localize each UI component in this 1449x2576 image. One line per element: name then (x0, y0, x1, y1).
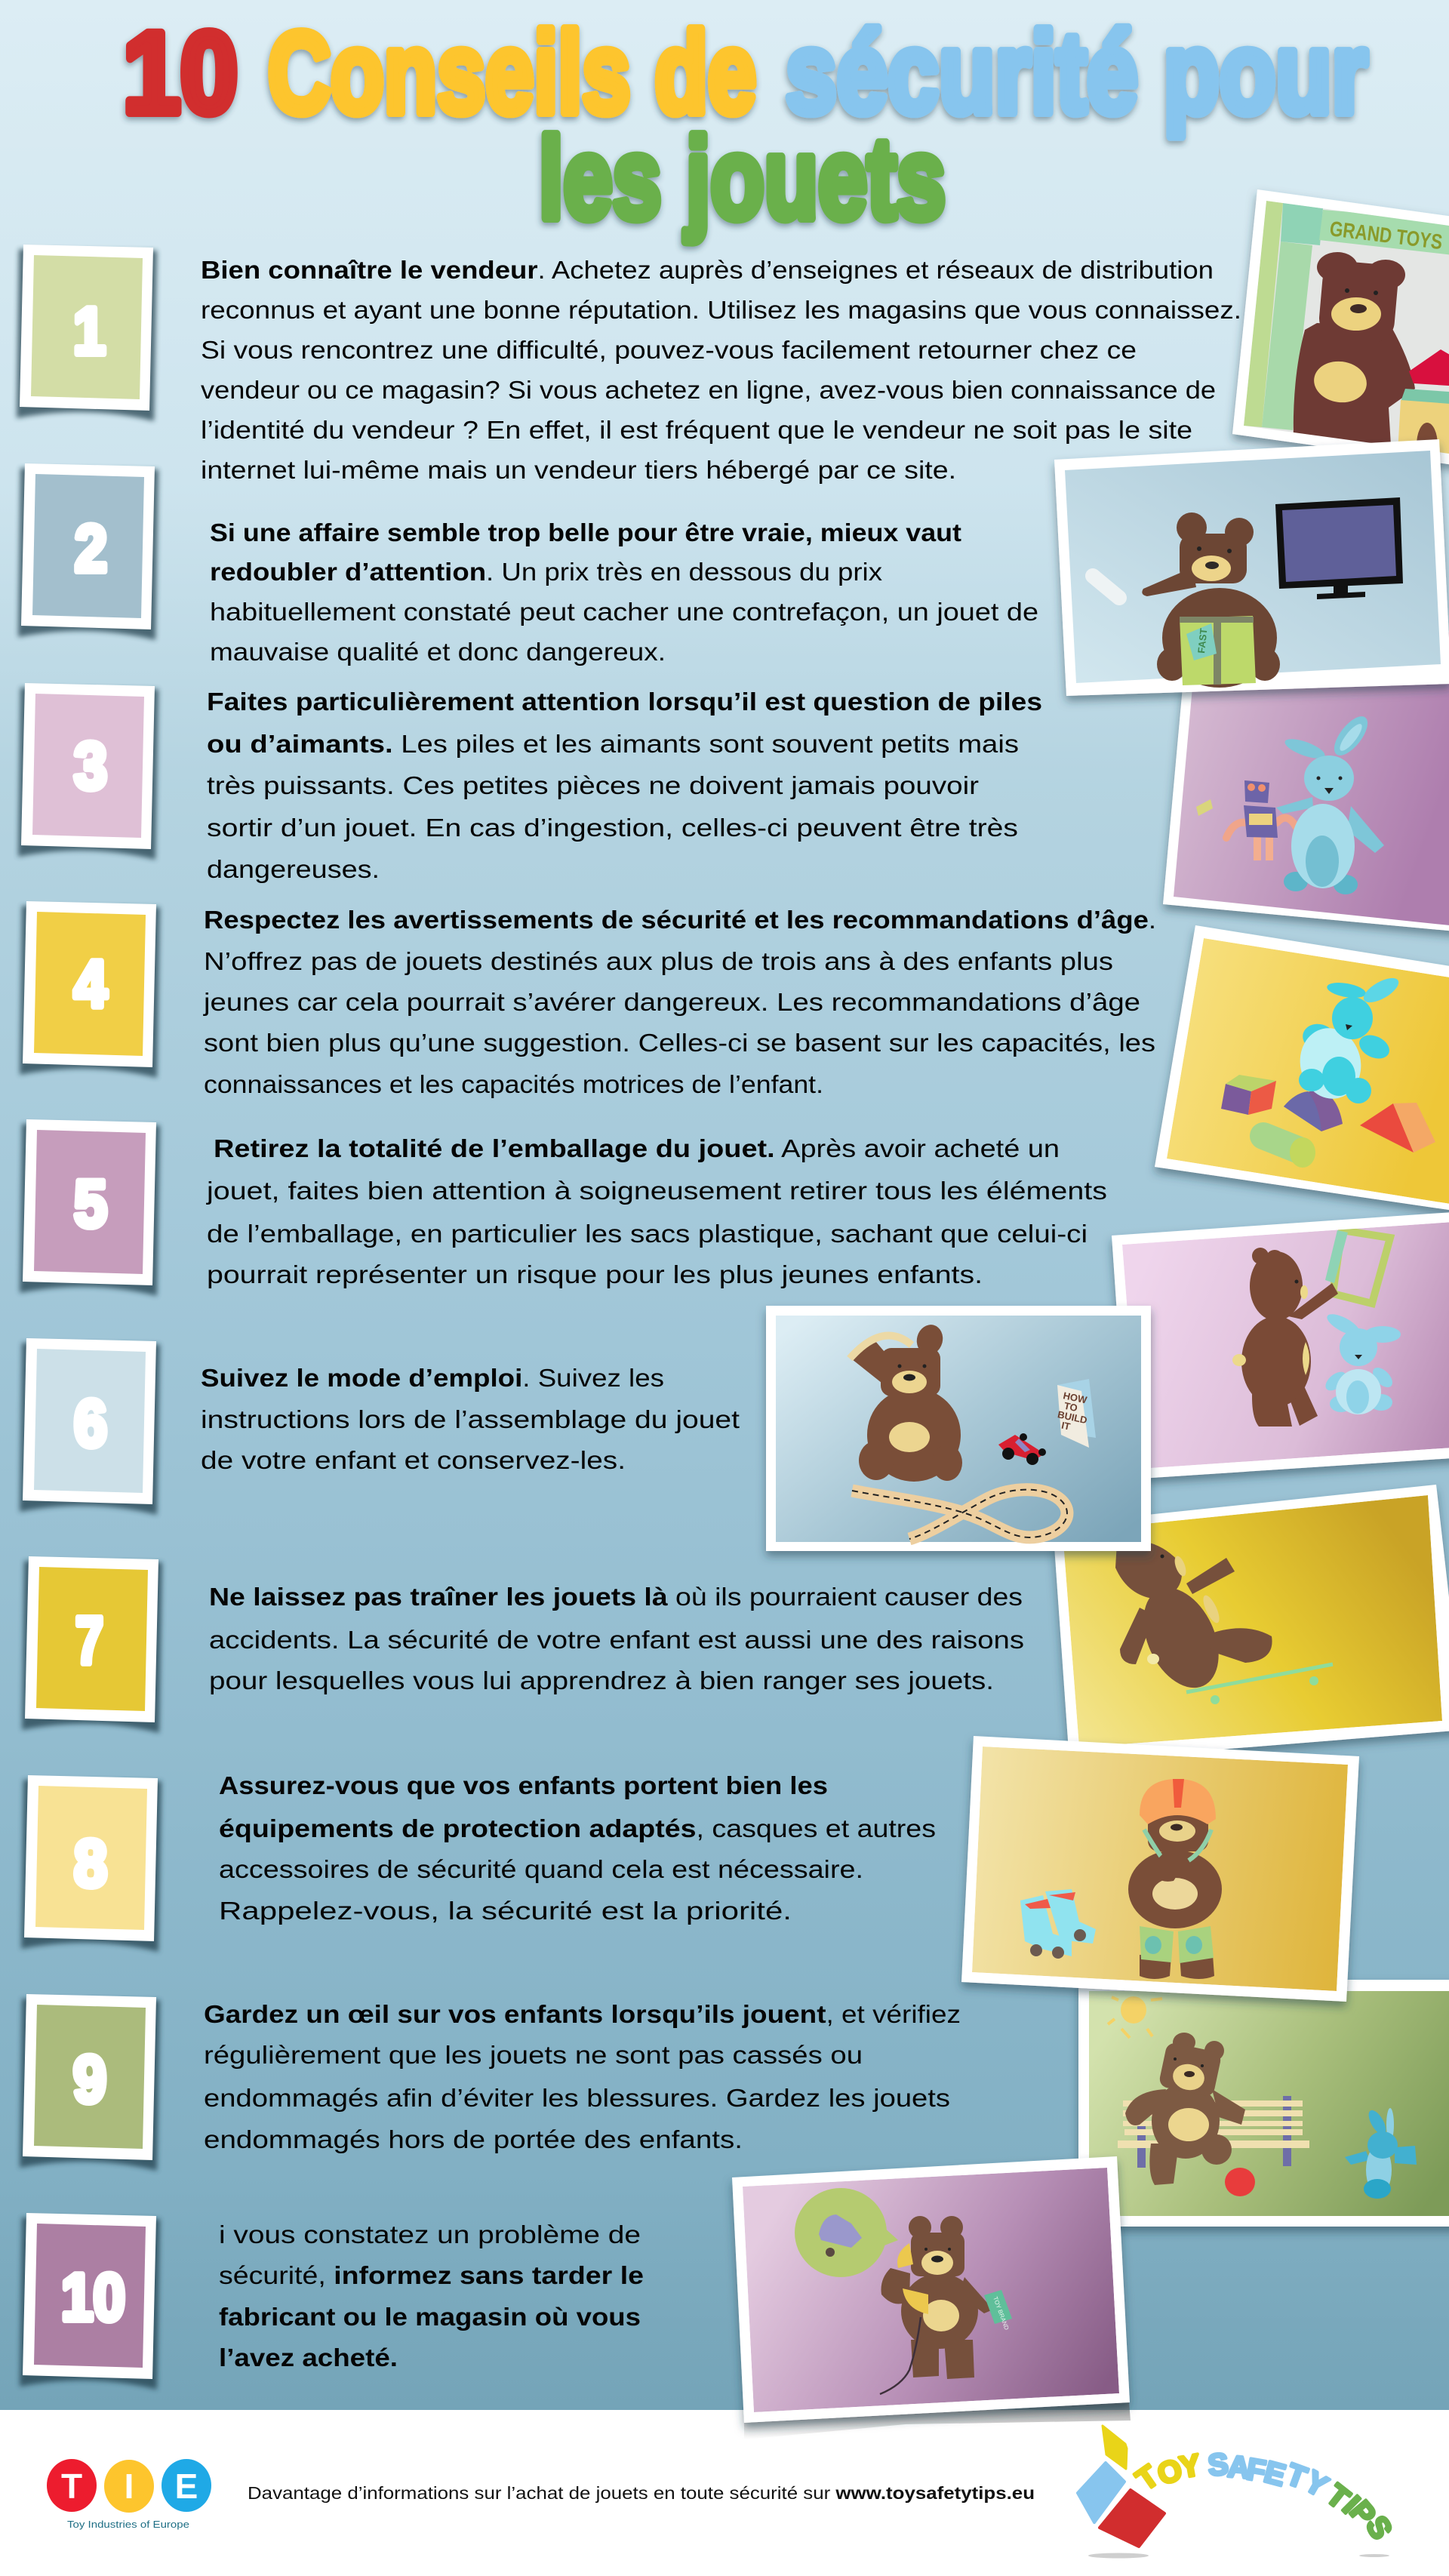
track (852, 1490, 1067, 1539)
tip 6 text: de votre enfant et conservez-les. (201, 1446, 626, 1474)
number tile 4: 4 (74, 946, 107, 1021)
instruction booklet: IT (1060, 1420, 1072, 1433)
tip 2 text: Si une affaire semble trop belle pour être vraie, mieux vaut (210, 519, 961, 546)
tip 7 text: Ne laissez pas traîner les jouets là où ils pourraient causer des (209, 1583, 1023, 1611)
number tile 3 (18, 683, 158, 860)
tip 1 text: Bien connaître le vendeur . Achetez auprès d’enseignes et réseaux de distribution (201, 256, 1214, 284)
photo 2: bear, TV and parcel (1054, 439, 1449, 696)
bear (880, 2216, 993, 2394)
footer: Toy Safety Tips logo (1078, 2426, 1398, 2559)
footer: TIE logo (47, 2459, 211, 2530)
footer: TIE logo: T (61, 2467, 82, 2506)
ID tag: TOY BRAND (992, 2296, 1011, 2331)
tip 3 text: sortir d’un jouet. En cas d’ingestion, celles-ci peuvent être très (207, 814, 1018, 842)
tip 8 text: Assurez-vous que vos enfants portent bien les (219, 1771, 828, 1799)
photo 10: bear calling on the phone (732, 2156, 1130, 2423)
photo 3: rabbit and robot (1163, 604, 1449, 936)
title (123, 8, 1367, 243)
tip 4 text: N’offrez pas de jouets destinés aux plus de trois ans à des enfants plus (204, 947, 1113, 975)
bench (1118, 2096, 1309, 2168)
footer: Toy Safety Tips logo: TIPS (1320, 2478, 1398, 2545)
number tile 3: 3 (74, 728, 107, 803)
ID tag (984, 2290, 1012, 2331)
number tile 8 (21, 1775, 162, 1952)
tip 5 text: Retirez la totalité de l’emballage du jouet. Après avoir acheté un (214, 1134, 1060, 1162)
tip 8 text (219, 1771, 936, 1925)
photo 1: bear at toy store (1232, 189, 1449, 468)
title: les jouets (539, 114, 946, 243)
number tile 7: 7 (75, 1603, 103, 1678)
tip 5 text (206, 1134, 1107, 1288)
sticker (1196, 799, 1213, 816)
ball (1225, 2168, 1255, 2196)
tip 8 text: équipements de protection adaptés , casques et autres (219, 1814, 936, 1842)
photo 10 footer shadow (744, 2402, 1131, 2439)
tip 1 text (201, 256, 1241, 484)
footer band (0, 2410, 1449, 2576)
number tile 2 (18, 463, 158, 640)
photo 9: bear on bench with rabbit (1078, 1980, 1449, 2227)
tip 7 text (209, 1583, 1024, 1694)
television (1275, 497, 1403, 599)
tip 5 text: de l’emballage, en particulier les sacs plastique, sachant que celui-ci (207, 1220, 1088, 1248)
rabbit (1322, 1310, 1401, 1414)
photo 4: rabbit and blocks (1155, 925, 1449, 1212)
eraser (1093, 576, 1119, 598)
tip 3 text: ou d’aimants. Les piles et les aimants sont souvent petits mais (207, 730, 1019, 758)
tip 3 text: Faites particulièrement attention lorsqu’il est question de piles (207, 688, 1042, 716)
tip 6 text: instructions lors de l’assemblage du jouet (201, 1405, 740, 1433)
blocks (1221, 1075, 1435, 1168)
number tile 5 (20, 1119, 160, 1296)
tip 1 text: reconnus et ayant une bonne réputation. Utilisez les magasins que vous connaissez. (201, 296, 1241, 324)
tip 7 text: accidents. La sécurité de votre enfant est aussi une des raisons (209, 1626, 1024, 1654)
bear with parcel (1142, 512, 1280, 688)
instruction booklet: HOW (1062, 1390, 1088, 1406)
tip 8 text: Rappelez-vous, la sécurité est la priorité. (219, 1897, 792, 1925)
number tile 1: 1 (73, 294, 106, 368)
toy house (1409, 349, 1449, 386)
title: 10 (123, 8, 238, 137)
number tile 1 (17, 245, 157, 421)
footer: Toy Safety Tips logo: SAFETY (1207, 2448, 1334, 2504)
number tile 4 (20, 901, 160, 1078)
tip 3 text (207, 688, 1042, 883)
speech bubble with car (795, 2188, 898, 2277)
tip 10 text (219, 2221, 644, 2371)
number tile 6 (20, 1338, 160, 1515)
title: Conseils de (268, 8, 756, 137)
tip 10 text: i vous constatez un problème de (219, 2221, 641, 2248)
tip 1 text: l’identité du vendeur ? En effet, il est fréquent que le vendeur ne soit pas le site (201, 416, 1192, 444)
bear (1241, 1248, 1338, 1426)
number tile 2: 2 (75, 511, 107, 586)
tip 3 text: dangereuses. (207, 855, 380, 883)
tip 8 text: accessoires de sécurité quand cela est nécessaire. (219, 1855, 863, 1883)
bear (1115, 1540, 1272, 1700)
tip 2 text (210, 519, 1038, 666)
phone (897, 2243, 928, 2314)
tip 9 text: Gardez un œil sur vos enfants lorsqu’ils jouent , et vérifiez (204, 2000, 961, 2028)
number tile 10 (20, 2213, 160, 2390)
tip 2 text: mauvaise qualité et donc dangereux. (210, 638, 666, 666)
tip 2 text: redoubler d’attention . Un prix très en dessous du prix (210, 558, 883, 586)
number tile 6: 6 (74, 1386, 107, 1460)
footer: TIE logo: I (125, 2467, 134, 2506)
toy car (998, 1433, 1046, 1465)
instruction booklet: BUILD (1057, 1408, 1088, 1426)
footer text: Davantage d’informations sur l’achat de jouets en toute sécurité sur www.toysafetytips.eu (248, 2483, 1035, 2503)
roller skates (1020, 1889, 1096, 1959)
number tile 7 (22, 1556, 162, 1733)
tip 1 text: internet lui-même mais un vendeur tiers hébergé par ce site. (201, 456, 956, 484)
instruction booklet (1054, 1379, 1096, 1448)
number tile 8: 8 (74, 1826, 107, 1900)
tip 4 text (203, 906, 1156, 1098)
photo 6: bear assembling track and car (766, 1306, 1151, 1551)
tip 4 text: jeunes car cela pourrait s’avérer dangereux. Les recommandations d’âge (203, 988, 1140, 1016)
tip 1 text: vendeur ou ce magasin? Si vous achetez en ligne, avez-vous bien connaissance de (201, 376, 1216, 404)
tip 10 text: fabricant ou le magasin où vous (219, 2303, 641, 2331)
packaging (1325, 1230, 1390, 1303)
instruction booklet: TO (1063, 1400, 1078, 1414)
number tile 5: 5 (74, 1166, 107, 1241)
number tile 10: 10 (61, 2260, 125, 2334)
sun (1108, 1996, 1162, 2038)
tip 3 text: très puissants. Ces petites pièces ne doivent jamais pouvoir (207, 771, 979, 799)
tip 2 text: habituellement constaté peut cacher une contrefaçon, un jouet de (210, 598, 1038, 626)
robot (1226, 780, 1296, 860)
tip 6 text (201, 1364, 740, 1474)
bear (1125, 2033, 1245, 2185)
tip 7 text: pour lesquelles vous lui apprendrez à bien ranger ses jouets. (209, 1667, 994, 1694)
rabbit (1294, 973, 1402, 1104)
tip 4 text: Respectez les avertissements de sécurité et les recommandations d’âge . (204, 906, 1156, 934)
TIE caption: Toy Industries of Europe (67, 2519, 189, 2530)
tip 9 text: régulièrement que les jouets ne sont pas cassés ou (204, 2041, 863, 2069)
tip 4 text: connaissances et les capacités motrices de l’enfant. (204, 1070, 823, 1098)
tip 5 text: jouet, faites bien attention à soigneusement retirer tous les éléments (206, 1177, 1107, 1205)
photo 8: bear with helmet and roller skates (961, 1736, 1359, 2002)
rabbit (1345, 2107, 1417, 2199)
bear (1128, 1779, 1222, 1979)
photo 7: bear falling from skateboard (1053, 1485, 1449, 1762)
number tile 9: 9 (73, 2042, 106, 2116)
bear (1294, 252, 1415, 445)
tip 1 text: Si vous rencontrez une difficulté, pouvez-vous facilement retourner chez ce (201, 336, 1137, 364)
tip 9 text (204, 2000, 961, 2153)
tip 5 text: pourrait représenter un risque pour les plus jeunes enfants. (207, 1260, 983, 1288)
number tile 9 (20, 1994, 160, 2171)
tip 10 text: sécurité, informez sans tarder le (219, 2261, 644, 2289)
tip 9 text: endommagés afin d’éviter les blessures. Gardez les jouets (204, 2084, 950, 2112)
tip 9 text: endommagés hors de portée des enfants. (204, 2125, 743, 2153)
footer: Toy Safety Tips logo: TOY (1131, 2448, 1203, 2497)
FAST tag: FAST (1195, 628, 1209, 654)
tip 4 text: sont bien plus qu’une suggestion. Celles-ci se basent sur les capacités, les (204, 1029, 1155, 1057)
tip 6 text: Suivez le mode d’emploi . Suivez les (201, 1364, 664, 1392)
rabbit (1276, 711, 1384, 894)
footer: TIE logo: E (175, 2467, 198, 2506)
bear (848, 1322, 962, 1482)
tip 10 text: l’avez acheté. (219, 2344, 398, 2371)
skateboard (1186, 1664, 1333, 1704)
photo 5: bear opening packaging with rabbit (1112, 1211, 1449, 1479)
